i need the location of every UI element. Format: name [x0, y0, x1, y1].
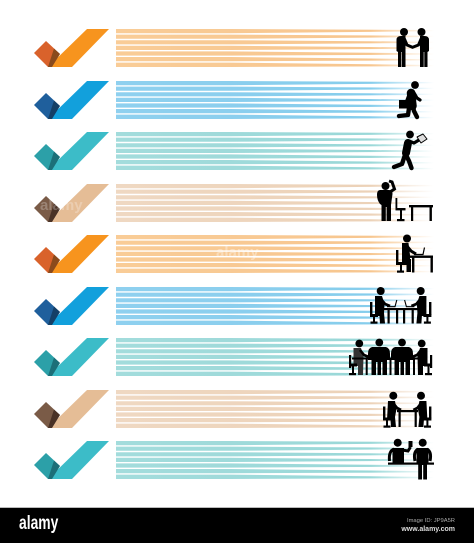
- watermark text: alamy: [40, 197, 83, 214]
- row 3: striped bar: [116, 132, 434, 170]
- row 3 icon: walking with document: [394, 131, 427, 168]
- row 4: striped bar: [116, 184, 434, 222]
- row 9 icon: reception desk with two people: [388, 439, 434, 480]
- row 3: teal check: [34, 132, 109, 170]
- row 8 icon: two people at table: [383, 392, 431, 428]
- row 1 icon: handshake: [396, 28, 429, 67]
- row 9: teal check: [34, 441, 109, 479]
- row 6: striped bar: [116, 287, 434, 325]
- row 8: tan check: [34, 390, 109, 428]
- row 7: striped bar: [116, 338, 434, 376]
- footer bar: [0, 507, 474, 543]
- watermark text: [40, 197, 259, 261]
- row 2 icon: walking with briefcase: [399, 81, 420, 117]
- image id: Image ID: JP9A5R: [407, 518, 455, 524]
- row 2: blue check: [34, 81, 109, 119]
- row 5: orange check: [34, 235, 109, 273]
- row 6 icon: two people at table with laptops: [370, 287, 431, 324]
- row 8: striped bar: [116, 390, 434, 428]
- row 9: striped bar: [116, 441, 434, 479]
- footer logo: alamy: [19, 513, 58, 534]
- row 2: striped bar: [116, 81, 434, 119]
- row 5: striped bar: [116, 235, 434, 273]
- row 7: teal check: [34, 338, 109, 376]
- row 4 icon: standing on phone by desk: [377, 181, 433, 221]
- row 5 icon: person at laptop: [396, 234, 433, 273]
- watermark text: alamy: [216, 244, 259, 261]
- row 7 icon: group meeting around table: [349, 339, 432, 375]
- website: www.alamy.com: [401, 526, 455, 533]
- row 1: striped bar: [116, 29, 434, 67]
- row 1: orange check: [34, 29, 109, 67]
- row 4: tan check: [34, 184, 109, 222]
- row 6: blue check: [34, 287, 109, 325]
